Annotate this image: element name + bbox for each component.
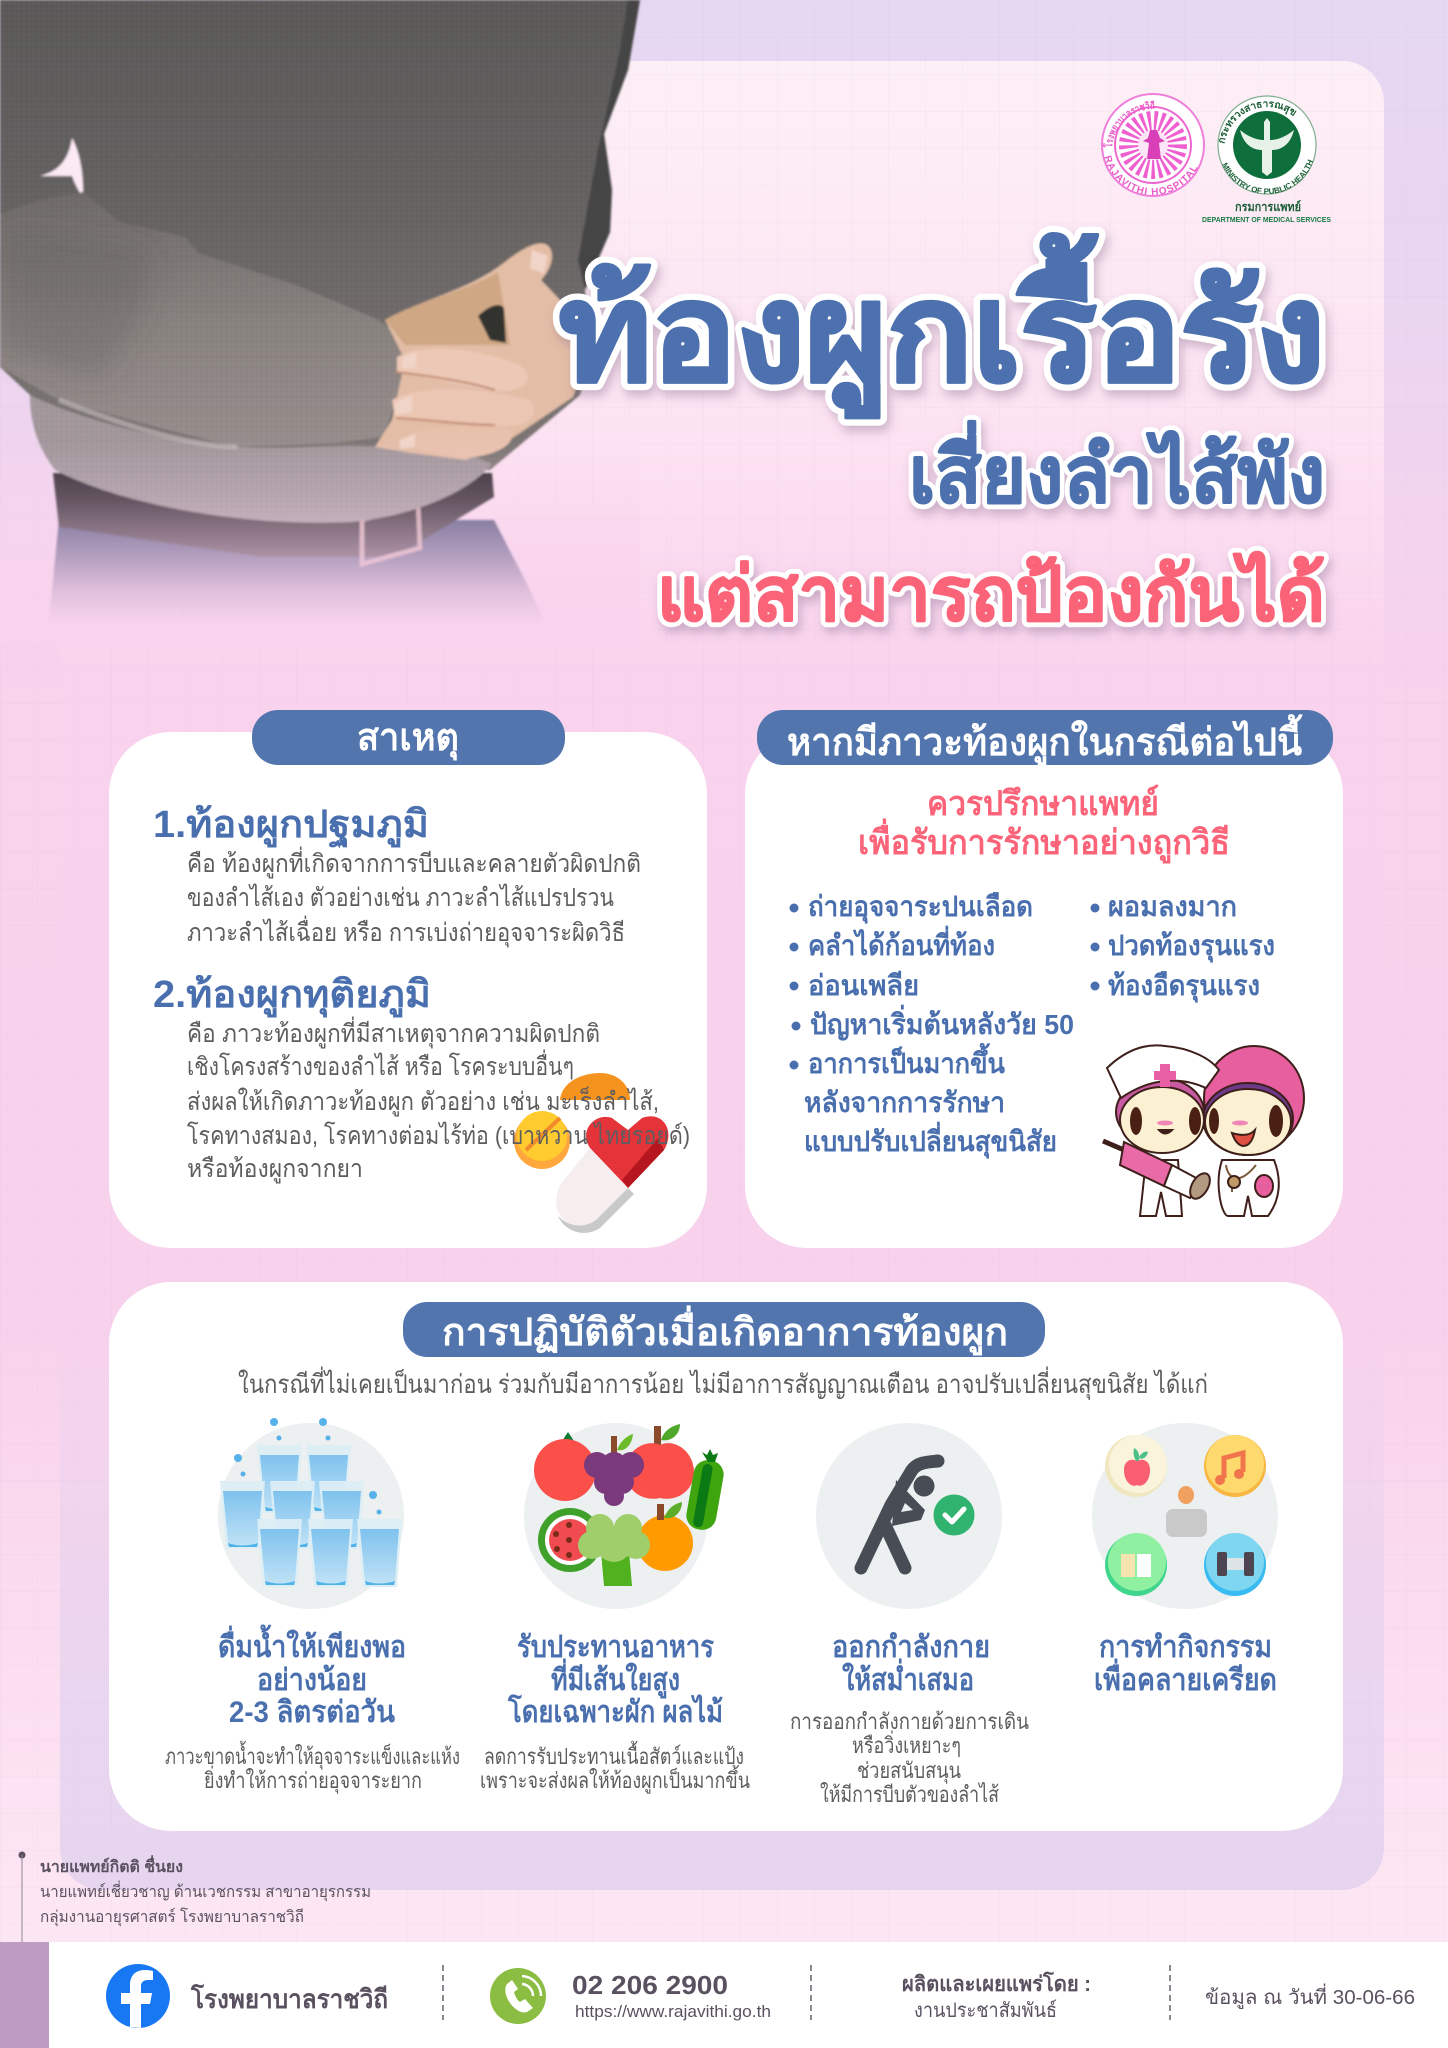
text: secondary description: โรคทางสมอง, โรคทางต่อมไร้ท่อ (เบาหวาน ไทยรอยด์) xyxy=(187,1121,690,1150)
panel: self care: เพราะจะส่งผลให้ท้องผูกเป็นมากขึ้น xyxy=(480,1765,750,1794)
panel: self care: ช่วยสนับสนุน xyxy=(857,1758,961,1784)
text: exercise: ออกกำลังกาย xyxy=(832,1631,990,1664)
heading: primary constipation: 1.ท้องผูกปฐมภูมิ xyxy=(153,804,429,849)
list: warning symptoms left: หลังจากการรักษา xyxy=(804,1087,1005,1118)
icon: stress relief activities xyxy=(1092,1423,1278,1609)
text: drink water xyxy=(218,1624,406,1729)
panel: self care: หรือวิ่งเหยาะๆ xyxy=(852,1730,961,1758)
elbow shadow xyxy=(0,232,151,380)
icon: phone xyxy=(490,1968,546,2024)
logo: ministry of public health: กระทรวงสาธารณสุข xyxy=(1219,101,1296,144)
text: publisher: งานประชาสัมพันธ์ xyxy=(914,1999,1057,2022)
doctor credit: นายแพทย์กิตติ ชื่นยง xyxy=(40,1855,183,1876)
logo: Rajavithi hospital: โรงพยาบาลราชวิถี xyxy=(1103,100,1154,148)
text: eat fibre: ที่มีเส้นใยสูง xyxy=(551,1658,680,1699)
icon: nurse and doctor mascots xyxy=(1103,1045,1304,1216)
text: stress relief: การทำกิจกรรม xyxy=(1099,1631,1272,1664)
text: see a doctor xyxy=(858,784,1230,864)
panel: self care xyxy=(109,1282,1343,1831)
icon: facebook xyxy=(106,1964,170,2028)
panel: self care: ภาวะขาดน้ำจะทำให้อุจจาระแข็งและแห้ง xyxy=(165,1741,460,1770)
text: data date: ข้อมูล ณ วันที่ 30-06-66 xyxy=(1205,1983,1415,2010)
title: ท้องผูกเรื้อรัง xyxy=(559,233,1325,418)
photo: man holding stomach xyxy=(0,0,640,645)
text: publisher: ผลิตและเผยแพร่โดย : xyxy=(902,1971,1091,1996)
logo: ministry of public health xyxy=(1202,95,1331,224)
title: แต่สามารถป้องกันได้ xyxy=(657,550,1325,636)
panel: causes xyxy=(109,732,707,1248)
belt xyxy=(53,473,494,557)
logo: ministry of public health: MINISTRY OF PUBLIC HEALTH xyxy=(1222,159,1314,194)
text: secondary description: คือ ภาวะท้องผูกที่มีสาเหตุจากความผิดปกติ xyxy=(187,1016,600,1049)
text: primary description: คือ ท้องผูกที่เกิดจากการบีบและคลายตัวผิดปกติ xyxy=(187,846,641,879)
doctor credit: นายแพทย์เชี่ยวชาญ ด้านเวชกรรม สาขาอายุรกรรม xyxy=(40,1880,371,1902)
text: secondary description: เชิงโครงสร้างของลำไส้ หรือ โรคระบบอื่นๆ xyxy=(187,1049,574,1081)
text: primary description xyxy=(187,846,641,948)
fingers xyxy=(397,349,528,391)
panel: self care: การออกกำลังกายด้วยการเดิน xyxy=(790,1709,1029,1734)
text: drink water: ดื่มน้ำให้เพียงพอ xyxy=(218,1624,406,1664)
panel: when to see a doctor xyxy=(745,732,1343,1248)
panel: self care: ยิ่งทำให้การถ่ายอุจจาระยาก xyxy=(204,1765,422,1794)
title: ท้องผูกเรื้อรัง xyxy=(559,233,1325,418)
text: eat fibre: รับประทานอาหาร xyxy=(517,1631,714,1664)
text: eat fibre: โดยเฉพาะผัก ผลไม้ xyxy=(507,1693,723,1729)
text: see a doctor: เพื่อรับการรักษาอย่างถูกวิธี xyxy=(858,818,1230,864)
heading pill: if constipation with these symptoms xyxy=(757,710,1333,766)
heading pill: causes: สาเหตุ xyxy=(357,717,459,761)
heading pill: causes xyxy=(252,710,565,765)
logo: ministry of public health: DEPARTMENT OF MEDICAL SERVICES xyxy=(1202,215,1331,224)
text: secondary description: หรือท้องผูกจากยา xyxy=(187,1155,363,1184)
text: stress relief xyxy=(1094,1631,1277,1697)
list: warning symptoms right: ผอมลงมาก xyxy=(1108,891,1237,922)
list: warning symptoms right xyxy=(1090,891,1275,1003)
icon: water glasses xyxy=(218,1418,404,1609)
heading: secondary constipation: 2.ท้องผูกทุติยภูมิ xyxy=(153,974,431,1018)
doctor credit: กลุ่มงานอายุรศาสตร์ โรงพยาบาลราชวิถี xyxy=(40,1907,304,1927)
list: warning symptoms left: คลำได้ก้อนที่ท้อง xyxy=(808,925,995,961)
text: primary description: ภาวะลำไส้เฉื่อย หรือ การเบ่งถ่ายอุจจาระผิดวิธี xyxy=(187,915,625,948)
footer xyxy=(0,1942,1448,2048)
list: warning symptoms left: อ่อนเพลีย xyxy=(808,970,919,1001)
list: warning symptoms right: ท้องอืดรุนแรง xyxy=(1108,970,1260,1003)
list: warning symptoms right: ปวดท้องรุนแรง xyxy=(1108,930,1275,963)
text: secondary description: ส่งผลให้เกิดภาวะท้องผูก ตัวอย่าง เช่น มะเร็งลำไส้, xyxy=(187,1086,659,1117)
text: secondary description xyxy=(187,1016,690,1184)
text: stress relief: เพื่อคลายเครียด xyxy=(1094,1658,1277,1697)
sweater hem xyxy=(30,395,492,523)
logo: ministry of public health: กรมการแพทย์ xyxy=(1235,200,1301,214)
text: eat fibre xyxy=(507,1631,723,1729)
gap between arm and body xyxy=(40,138,83,198)
text: drink water: อย่างน้อย xyxy=(257,1664,367,1697)
fade into background xyxy=(0,440,640,645)
list: warning symptoms left: แบบปรับเปลี่ยนสุขนิสัย xyxy=(804,1121,1057,1159)
text: primary description: ของลำไส้เอง ตัวอย่างเช่น ภาวะลำไส้แปรปรวน xyxy=(187,883,614,912)
text: phone number: 02 206 2900 xyxy=(572,1970,728,2000)
title: เสี่ยงลำไส้พัง xyxy=(909,420,1325,519)
list: warning symptoms left: อาการเป็นมากขึ้น xyxy=(808,1042,1005,1079)
panel: self care: ลดการรับประทานเนื้อสัตว์และแป้ง xyxy=(484,1741,744,1769)
heading pill: if constipation with these symptoms: หากมีภาวะท้องผูกในกรณีต่อไปนี้ xyxy=(787,714,1303,766)
heading pill: self care xyxy=(403,1302,1045,1357)
text: hospital name: โรงพยาบาลราชวิถี xyxy=(190,1983,388,2014)
text: exercise xyxy=(832,1631,990,1697)
hand xyxy=(375,243,593,460)
logo: Rajavithi hospital: RAJAVITHI HOSPITAL xyxy=(1104,155,1198,195)
list: warning symptoms left xyxy=(790,891,1074,1159)
logo: Rajavithi hospital xyxy=(1101,93,1205,197)
sweater body xyxy=(0,0,640,470)
icon: fruit and vegetables xyxy=(524,1423,726,1609)
text: see a doctor: ควรปรึกษาแพทย์ xyxy=(927,784,1159,823)
text: exercise: ให้สม่ำเสมอ xyxy=(842,1658,974,1697)
title xyxy=(559,233,1325,636)
forearm sleeve xyxy=(0,192,407,447)
heading pill: self care: การปฏิบัติตัวเมื่อเกิดอาการท้องผูก xyxy=(442,1305,1008,1356)
panel: self care: ให้มีการบีบตัวของลำไส้ xyxy=(820,1782,999,1807)
text: drink water: 2-3 ลิตรต่อวัน xyxy=(229,1696,395,1729)
icon: medicines xyxy=(514,1073,668,1233)
title: แต่สามารถป้องกันได้ xyxy=(657,550,1325,636)
text: website: https://www.rajavithi.go.th xyxy=(575,2002,771,2021)
list: warning symptoms left: ปัญหาเริ่มต้นหลังวัย 50 xyxy=(810,1004,1074,1041)
title: เสี่ยงลำไส้พัง xyxy=(909,420,1325,519)
back sleeve band xyxy=(578,0,640,290)
text: publisher xyxy=(902,1971,1091,2022)
icon: stretching exercise xyxy=(816,1423,1002,1609)
list: warning symptoms left: ถ่ายอุจจาระปนเลือด xyxy=(808,891,1033,924)
doctor credit xyxy=(18,1852,371,1943)
text: intro: ในกรณีที่ไม่เคยเป็นมาก่อน ร่วมกับมีอาการน้อย ไม่มีอาการสัญญาณเตือน อาจปรับเปลี่ยนสุขนิสัย ได้แก่ xyxy=(238,1366,1208,1400)
jeans xyxy=(47,520,553,640)
